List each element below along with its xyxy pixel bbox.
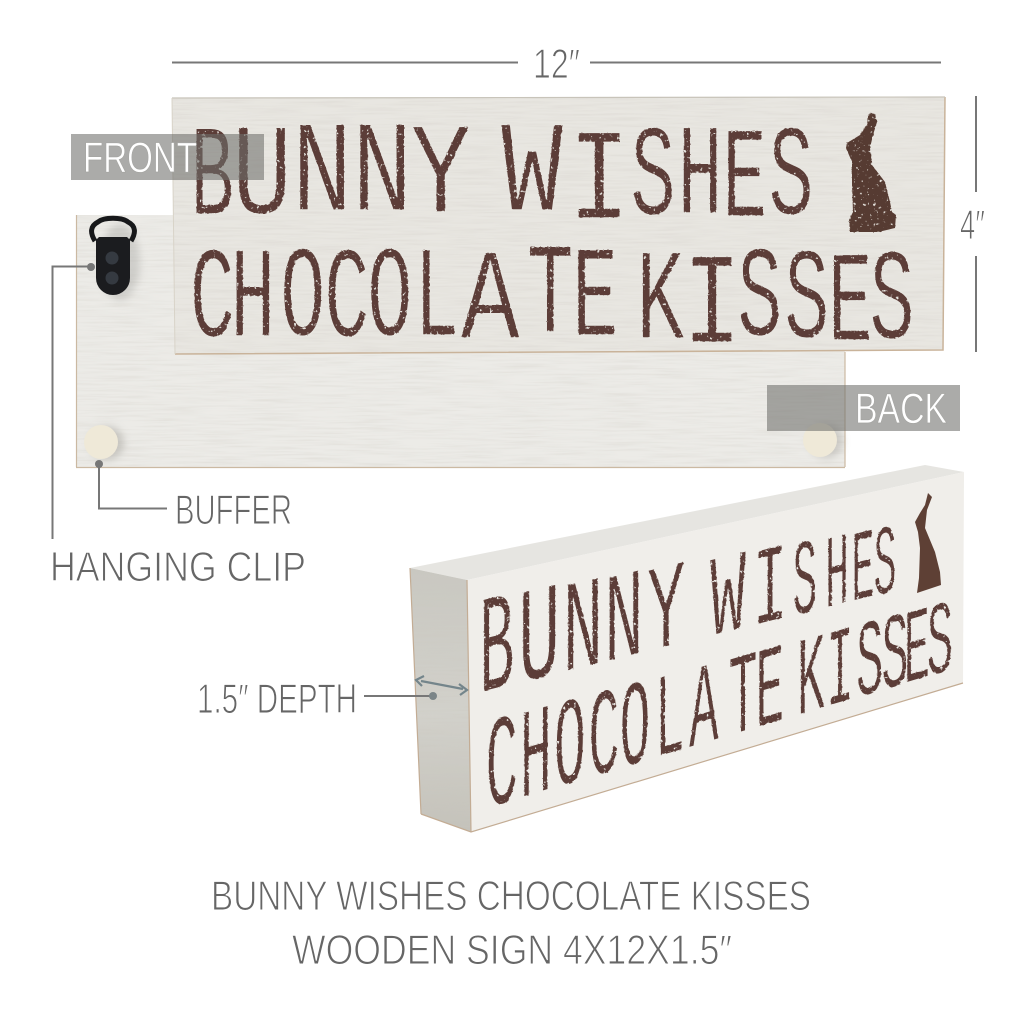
angled lettering: H bbox=[520, 682, 552, 837]
front lettering: A bbox=[461, 230, 520, 377]
angled lettering: S bbox=[927, 583, 953, 709]
callout: depth 1.5 inches: 1.5″ DEPTH bbox=[197, 675, 357, 722]
angled lettering: N bbox=[604, 546, 644, 701]
angled lettering: L bbox=[655, 649, 685, 794]
callout: buffer bbox=[95, 460, 292, 533]
label: front: FRONT bbox=[83, 134, 197, 182]
callout: buffer: BUFFER bbox=[175, 486, 292, 533]
front lettering: SHES bbox=[630, 105, 814, 255]
angled lettering: S bbox=[874, 507, 896, 626]
height dimension: 4 inches: 4″ bbox=[960, 201, 985, 248]
angled lettering: K bbox=[797, 614, 825, 749]
icon: hanging clip bbox=[92, 218, 140, 300]
angled lettering: S bbox=[793, 520, 817, 649]
angled lettering: W bbox=[710, 531, 746, 671]
arrow: depth bbox=[416, 676, 467, 695]
front lettering: K bbox=[636, 231, 685, 378]
callout: hanging clip: HANGING CLIP bbox=[50, 543, 306, 590]
angled lettering: C bbox=[486, 691, 518, 848]
angled lettering: C bbox=[588, 665, 620, 815]
angled lettering: E bbox=[755, 623, 784, 763]
back of sign board bbox=[76, 215, 845, 468]
label: back: BACK bbox=[855, 385, 947, 433]
front of sign board bbox=[172, 97, 945, 381]
front lettering: I bbox=[682, 234, 742, 381]
icon: right buffer bbox=[803, 423, 843, 458]
label: back bbox=[767, 385, 960, 433]
block side face bbox=[410, 568, 471, 832]
product title: WOODEN SIGN 4X12X1.5″ bbox=[292, 926, 732, 973]
front lettering: SSES bbox=[737, 227, 915, 379]
angled lettering: U bbox=[518, 559, 560, 724]
icon: chocolate bunny bbox=[846, 113, 896, 232]
front lettering: WI bbox=[501, 103, 630, 258]
angled lettering: N bbox=[562, 554, 603, 712]
product title bbox=[211, 872, 811, 973]
angled lettering: O bbox=[554, 675, 586, 827]
width dimension: 12 inches: 12″ bbox=[533, 40, 580, 87]
angled lettering: E bbox=[851, 513, 875, 633]
block front face bbox=[467, 472, 964, 832]
icon: left buffer bbox=[84, 425, 124, 460]
icon: chocolate bunny, angled bbox=[915, 493, 941, 593]
callout: hanging clip bbox=[50, 263, 306, 590]
front lettering: UNNY bbox=[232, 103, 471, 253]
angled lettering: I bbox=[826, 606, 854, 740]
angled lettering: S bbox=[881, 594, 909, 724]
block top face bbox=[410, 465, 964, 580]
angled lettering: I bbox=[753, 524, 788, 659]
angled lettering: S bbox=[856, 600, 884, 731]
angled lettering: T bbox=[728, 630, 758, 771]
front lettering: B bbox=[190, 105, 234, 253]
angled lettering: E bbox=[904, 588, 930, 716]
front lettering bbox=[190, 103, 915, 381]
angled lettering bbox=[479, 501, 953, 848]
product title: BUNNY WISHES CHOCOLATE KISSES bbox=[211, 872, 811, 919]
angled view of sign block bbox=[410, 465, 964, 848]
angled lettering: H bbox=[825, 515, 849, 639]
angled lettering: Y bbox=[647, 540, 685, 689]
angled lettering: B bbox=[479, 568, 515, 735]
angled lettering: O bbox=[620, 659, 650, 806]
angled lettering: A bbox=[689, 642, 719, 784]
front lettering: TE bbox=[527, 225, 619, 375]
front lettering: CHOCOL bbox=[190, 227, 459, 375]
